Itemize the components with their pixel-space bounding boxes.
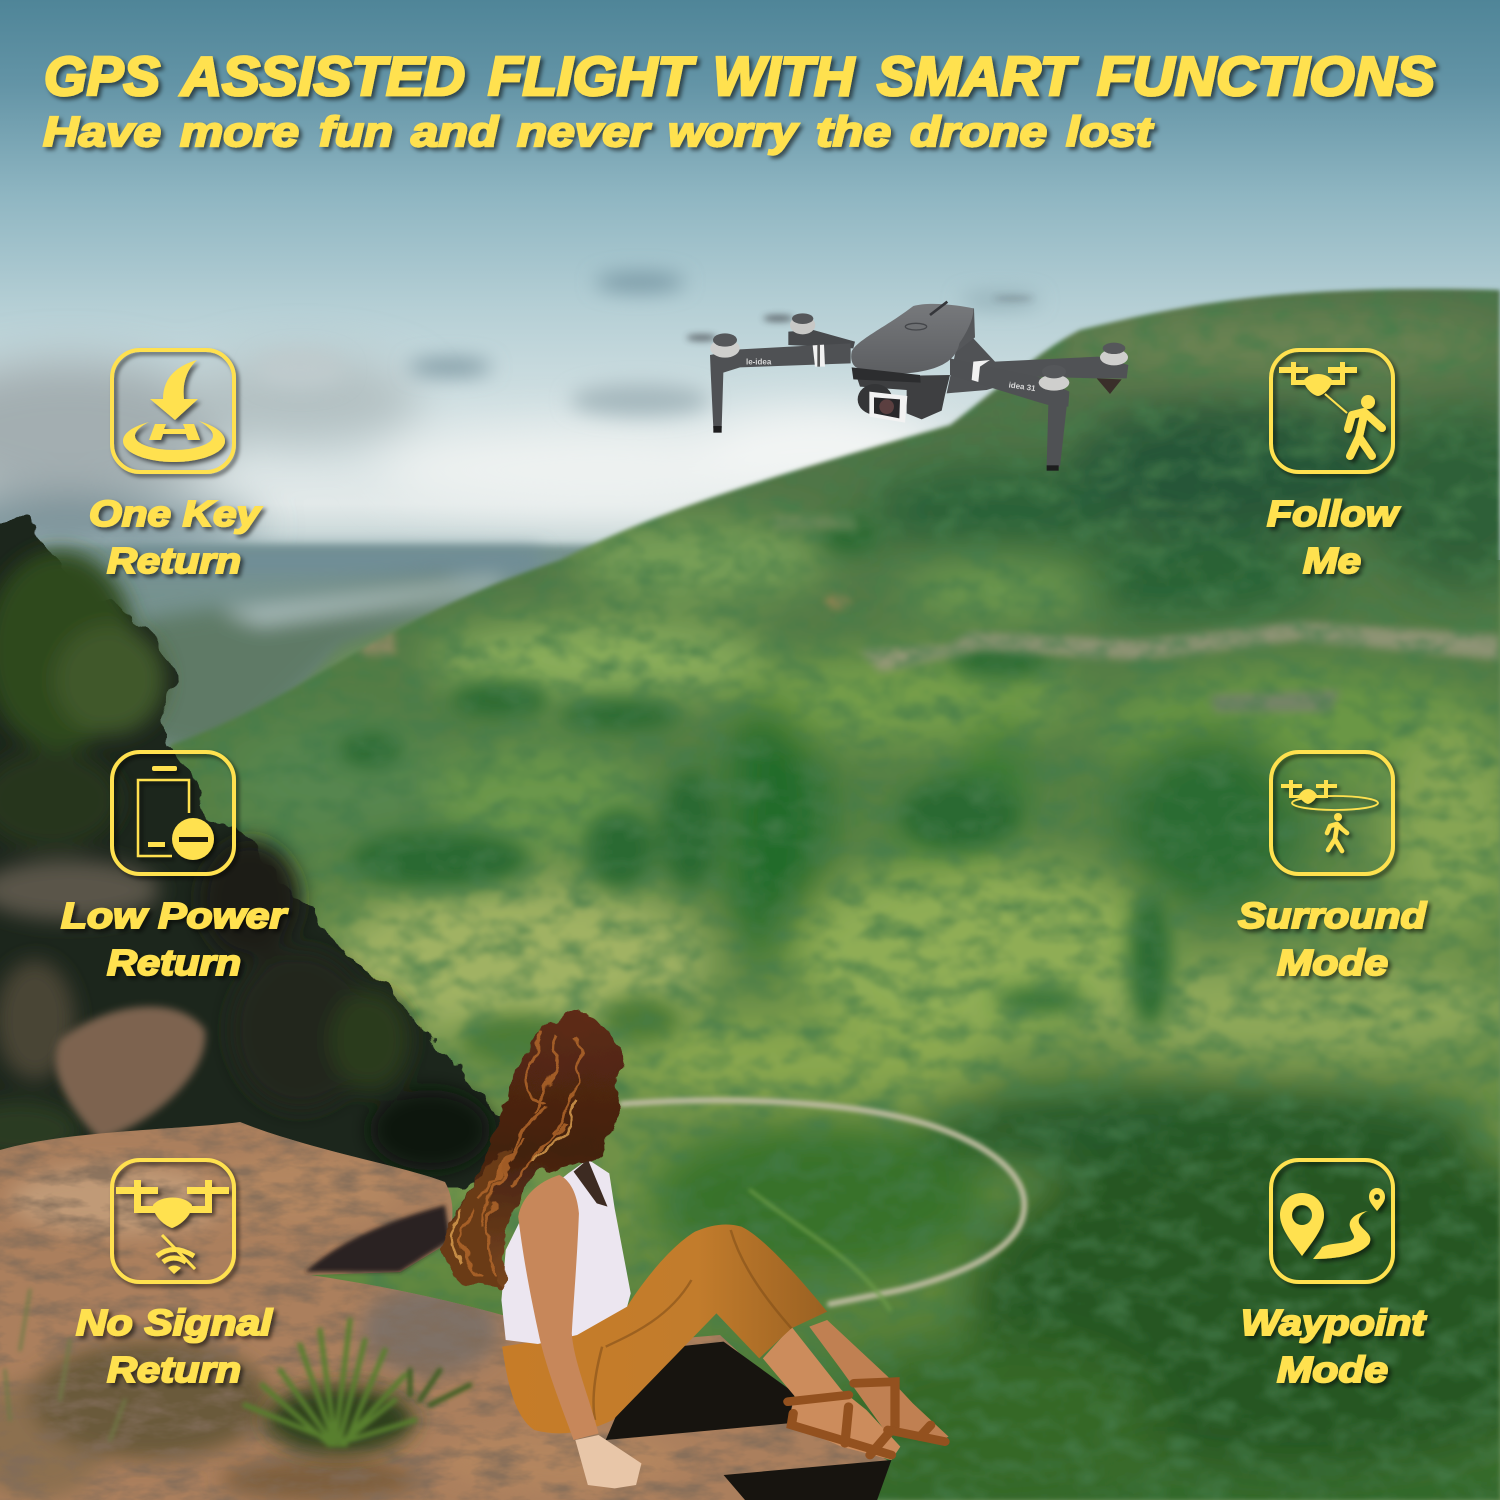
label: waypoint mode	[1241, 1302, 1427, 1390]
hair highlights	[454, 1033, 581, 1277]
sandals	[788, 1382, 945, 1455]
right arm label: idea 31	[1008, 380, 1037, 393]
label: no signal return: Return	[107, 1349, 241, 1390]
label: surround mode	[1238, 895, 1427, 983]
feature: waypoint mode	[1241, 1160, 1427, 1390]
title: WITH	[713, 45, 855, 107]
subtitle: Have	[43, 108, 161, 155]
illustration: drone	[687, 296, 1128, 471]
rock shadows	[606, 1342, 891, 1500]
label: one key return: Return	[107, 540, 241, 581]
subtitle: lost	[1066, 108, 1154, 155]
label: low power return: Low Power	[61, 895, 288, 936]
label: surround mode: Surround	[1238, 895, 1427, 936]
label: one key return: One Key	[89, 493, 262, 534]
icon: map pins with route	[1271, 1160, 1393, 1282]
white band	[813, 345, 825, 367]
arm labels: le-idea	[746, 358, 772, 367]
motors left	[710, 313, 815, 358]
icon: battery with minus	[112, 752, 234, 874]
hair	[441, 1013, 622, 1288]
title: FUNCTIONS	[1097, 45, 1435, 107]
rear arms	[788, 330, 855, 348]
icon: drone following walker	[1271, 350, 1393, 472]
subtitle: and	[411, 108, 500, 155]
background: green mountain	[168, 286, 1500, 1500]
title: FLIGHT	[488, 45, 697, 107]
front sensor band	[852, 367, 921, 383]
title	[44, 45, 1435, 107]
neckline	[574, 1159, 607, 1207]
label: follow me: Me	[1303, 540, 1361, 581]
background: sky	[0, 0, 1500, 560]
feature: one key return	[89, 350, 262, 581]
gimbal	[857, 375, 950, 419]
near leg and foot	[763, 1327, 900, 1460]
trousers	[502, 1224, 827, 1433]
feature: no signal return	[76, 1160, 273, 1390]
road loop	[622, 1100, 1024, 1310]
background: clouds	[0, 272, 1040, 551]
feature: follow me	[1267, 350, 1400, 581]
icon: helipad with arrow	[112, 350, 234, 472]
subtitle	[43, 108, 1154, 155]
left front arm and leg	[710, 343, 851, 428]
motors right	[1039, 343, 1128, 391]
subtitle: fun	[319, 108, 393, 155]
body	[952, 308, 975, 352]
background: distant plain	[0, 545, 600, 780]
subtitle: drone	[910, 108, 1047, 155]
label: surround mode: Mode	[1277, 942, 1388, 983]
trouser folds	[594, 1230, 791, 1420]
feature: surround mode	[1238, 752, 1427, 983]
hand	[575, 1435, 641, 1488]
grass clump	[5, 1290, 470, 1454]
subtitle: never	[517, 108, 652, 155]
title: SMART	[877, 45, 1078, 107]
label: low power return	[61, 895, 288, 983]
label: no signal return	[76, 1302, 273, 1390]
title: GPS	[44, 45, 160, 107]
arm	[518, 1175, 599, 1440]
subtitle: the	[816, 108, 891, 155]
background: left cliff and trees	[0, 510, 505, 1190]
title: ASSISTED	[179, 45, 465, 107]
subtitle: worry	[668, 108, 800, 155]
right arm	[950, 358, 1069, 467]
subtitle: more	[180, 108, 299, 155]
feature: low power return	[61, 752, 288, 983]
background: foreground rocks	[0, 1120, 900, 1500]
label: no signal return: No Signal	[76, 1302, 273, 1343]
illustration: woman sitting	[441, 1013, 949, 1500]
label: waypoint mode: Waypoint	[1241, 1302, 1427, 1343]
white top	[501, 1159, 631, 1344]
white band right	[972, 360, 990, 382]
label: follow me: Follow	[1267, 493, 1400, 534]
label: one key return	[89, 493, 262, 581]
label: follow me	[1267, 493, 1400, 581]
label: waypoint mode: Mode	[1277, 1349, 1388, 1390]
icon: drone orbiting walker	[1271, 752, 1393, 874]
label: low power return: Return	[107, 942, 241, 983]
far leg and foot	[809, 1320, 949, 1443]
camera	[869, 392, 907, 423]
icon: drone with crossed wifi	[112, 1160, 234, 1282]
propeller blur	[687, 296, 1033, 341]
